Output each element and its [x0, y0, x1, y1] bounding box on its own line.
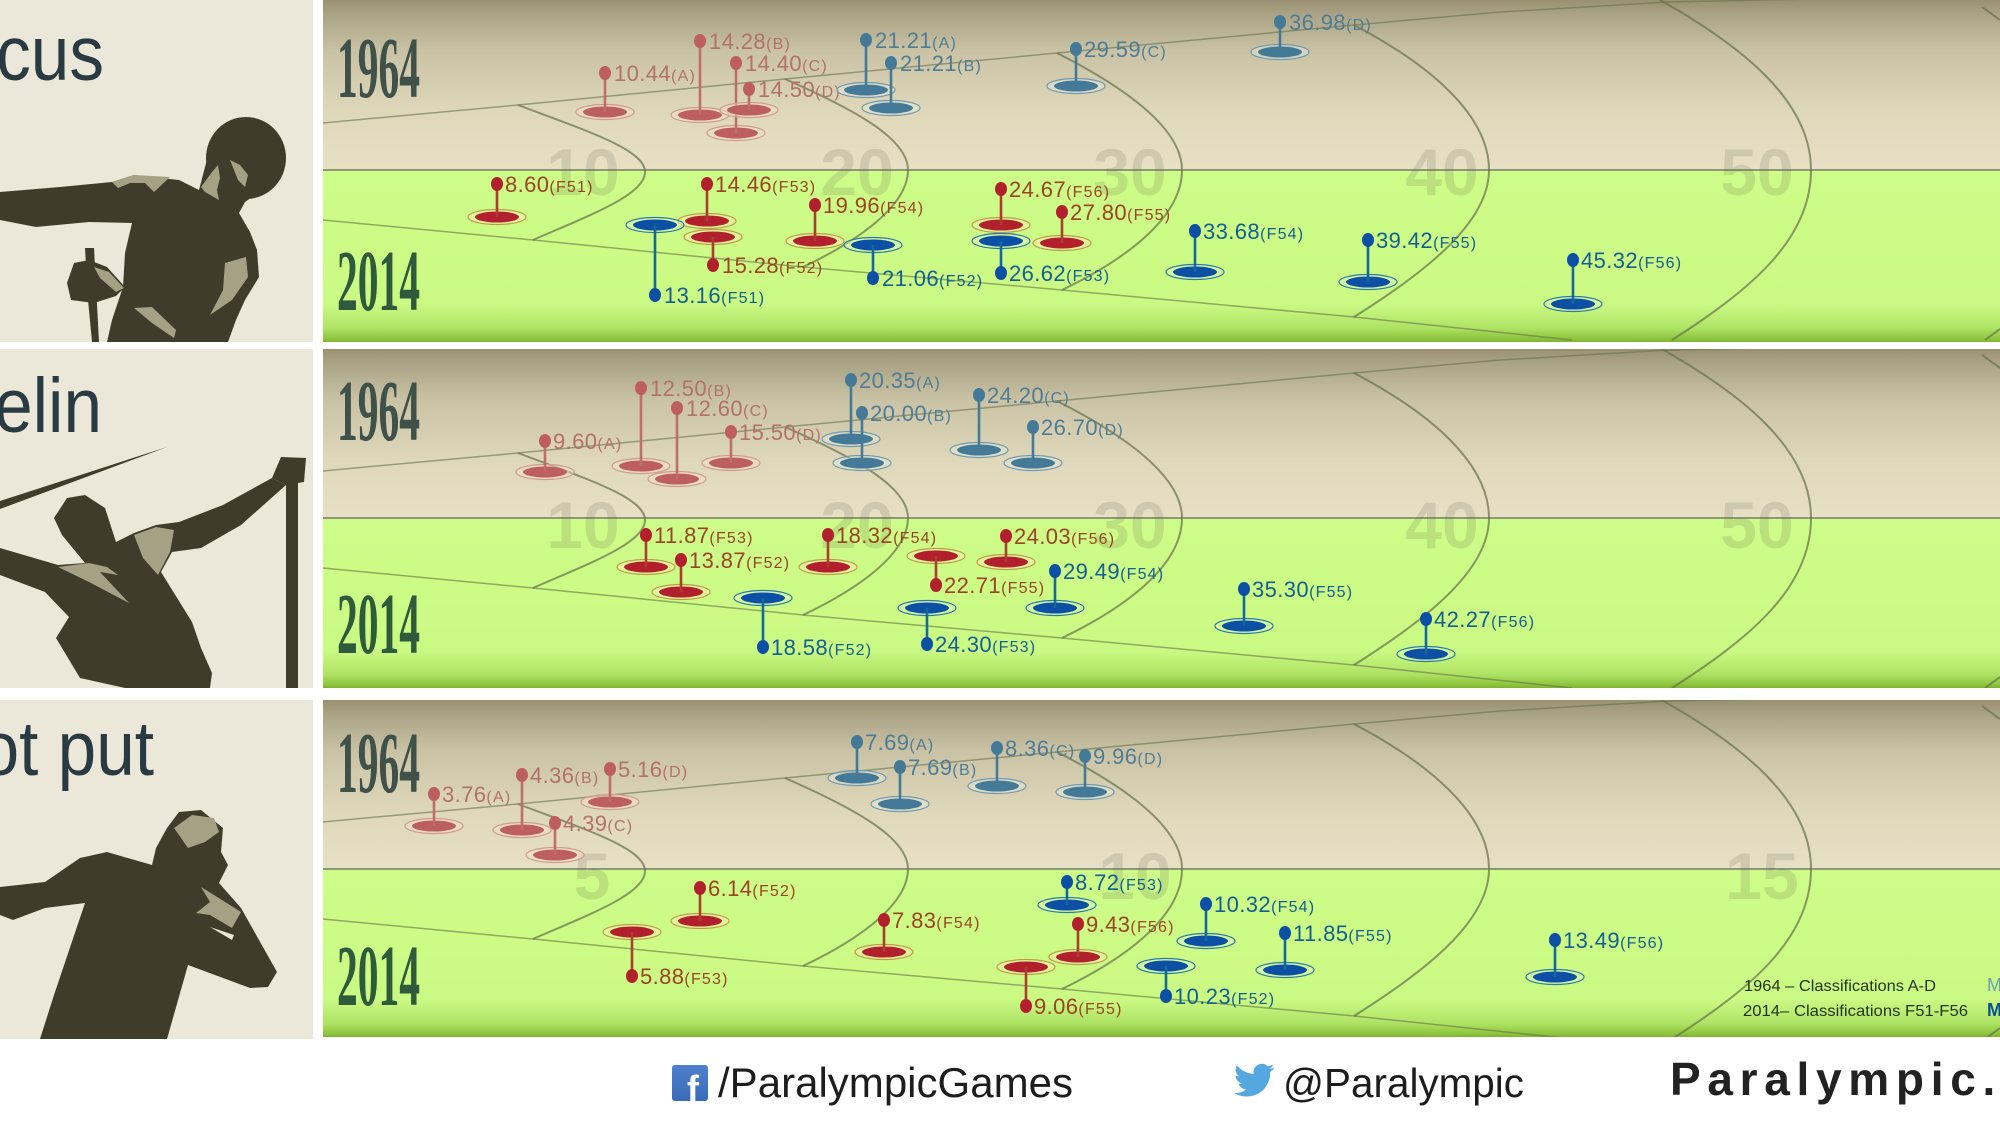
chart: javelin distances: 2014 — [337, 575, 420, 672]
pin 9.06 F55: 9.06(F55) — [1034, 994, 1123, 1019]
chart: shot put distances — [323, 694, 2000, 1039]
pin 5.88 F53: 5.88(F53) — [640, 964, 729, 989]
silhouette: shot putter — [0, 810, 277, 1039]
pin 14.46 F53: 14.46(F53) — [715, 172, 816, 197]
pin 11.87 F53 — [617, 523, 754, 574]
pin 18.58 F52: 18.58(F52) — [771, 635, 872, 660]
pin 13.16 F51 — [626, 218, 765, 308]
pin 5.88 F53 — [603, 924, 729, 989]
pin 24.30 F53 — [898, 600, 1036, 657]
pin 3.76 A: 3.76(A) — [442, 782, 511, 807]
pin 24.03 F56 — [977, 524, 1115, 570]
pin 9.43 F56 — [1049, 912, 1175, 964]
chart: discus distances: 1964 — [337, 19, 420, 116]
legend: 2014– Classifications F51-F56 — [1743, 1003, 1968, 1020]
pin 42.27 F56: 42.27(F56) — [1434, 607, 1535, 632]
pin 12.50 B — [612, 376, 732, 474]
pin 4.39 C: 4.39(C) — [563, 811, 633, 836]
pin 11.85 F55 — [1256, 921, 1393, 978]
pin 26.70 D: 26.70(D) — [1041, 415, 1124, 440]
pin 29.59 C: 29.59(C) — [1084, 37, 1167, 62]
pin 18.32 F54 — [799, 523, 937, 574]
pin 14.40 C — [707, 51, 828, 140]
distance scale: 40 — [1405, 488, 1479, 562]
chart: shot put distances: 2014 — [337, 927, 420, 1024]
pin 15.50 D — [702, 420, 822, 470]
chart: discus distances — [323, 0, 2000, 342]
pin 12.50 B: 12.50(B) — [650, 376, 732, 401]
silhouette: javelin thrower — [0, 447, 306, 688]
pin 21.21 B — [862, 51, 982, 116]
pin 8.60 F51 — [468, 172, 594, 224]
pin 8.36 C: 8.36(C) — [1005, 736, 1075, 761]
pin 6.14 F52 — [671, 876, 797, 928]
pin 7.83 F54 — [855, 908, 981, 960]
legend: 1964 – Classifications A-D — [1744, 978, 1936, 995]
pin 8.72 F53 — [1038, 870, 1164, 912]
pin 3.76 A — [405, 782, 511, 834]
pin 42.27 F56 — [1397, 607, 1535, 662]
pin 19.96 F54: 19.96(F54) — [823, 193, 924, 218]
pin 21.21 A: 21.21(A) — [875, 28, 957, 53]
pin 19.96 F54 — [786, 193, 924, 248]
pin 36.98 D — [1251, 10, 1372, 60]
pin 24.03 F56: 24.03(F56) — [1014, 524, 1115, 549]
pin 13.16 F51: 13.16(F51) — [664, 283, 765, 308]
pin 39.42 F55: 39.42(F55) — [1376, 228, 1477, 253]
pin 14.28 B: 14.28(B) — [709, 29, 791, 54]
pin 21.06 F52 — [844, 238, 983, 291]
pin 7.69 A — [828, 730, 934, 786]
pin 9.96 D — [1056, 744, 1163, 800]
pin 27.80 F55: 27.80(F55) — [1070, 200, 1171, 225]
pin 39.42 F55 — [1339, 228, 1477, 290]
distance scale: 10 — [546, 488, 620, 562]
pin 29.49 F54: 29.49(F54) — [1063, 559, 1164, 584]
pin 35.30 F55 — [1215, 577, 1353, 634]
pin 14.46 F53 — [678, 172, 816, 228]
distance scale — [546, 488, 1794, 562]
distance scale: 40 — [1405, 135, 1479, 209]
track sector lines and distance arcs — [323, 694, 2000, 1039]
pin 9.43 F56: 9.43(F56) — [1086, 912, 1175, 937]
pin 24.67 F56: 24.67(F56) — [1009, 177, 1110, 202]
pin 21.21 A — [837, 28, 957, 98]
pin 9.06 F55 — [997, 960, 1123, 1019]
pin 29.59 C — [1047, 37, 1167, 94]
legend — [1743, 975, 2000, 1020]
pin 12.60 C: 12.60(C) — [686, 396, 769, 421]
pin 10.32 F54: 10.32(F54) — [1214, 892, 1315, 917]
pin 15.50 D: 15.50(D) — [739, 420, 822, 445]
pin 10.32 F54 — [1177, 892, 1315, 948]
track sector lines and distance arcs — [323, 343, 2000, 688]
pin 15.28 F52 — [684, 230, 823, 278]
distance scale: 50 — [1720, 488, 1794, 562]
track sector lines and distance arcs — [323, 0, 2000, 340]
pin 45.32 F56 — [1544, 248, 1682, 312]
pin 7.69 A: 7.69(A) — [865, 730, 934, 755]
panel: shot put — [0, 694, 2000, 1039]
pin 11.87 F53: 11.87(F53) — [654, 523, 754, 548]
pin 7.69 B: 7.69(B) — [908, 755, 977, 780]
distance scale: 5 — [574, 839, 610, 913]
pin 10.44 A: 10.44(A) — [614, 61, 696, 86]
chart: javelin distances: 1964 — [337, 362, 420, 459]
facebook handle: /ParalympicGames — [718, 1059, 1073, 1106]
pin 27.80 F55 — [1033, 200, 1171, 250]
pin 22.71 F55 — [907, 548, 1045, 598]
distance scale — [546, 135, 1794, 209]
pin 10.44 A — [576, 61, 696, 120]
twitter handle: @Paralympic — [1283, 1060, 1524, 1106]
silhouette: discus thrower — [0, 117, 286, 342]
pin 24.20 C — [950, 383, 1070, 458]
panel: javelin — [0, 343, 2000, 688]
pin 14.28 B — [671, 29, 791, 122]
pin 15.28 F52: 15.28(F52) — [722, 253, 823, 278]
distance scale: 20 — [820, 135, 894, 209]
pin 26.70 D — [1004, 415, 1124, 470]
pin 24.67 F56 — [972, 177, 1110, 232]
pin 24.30 F53: 24.30(F53) — [935, 632, 1036, 657]
pin 4.39 C — [526, 811, 633, 862]
footer — [672, 1053, 2000, 1109]
athlete card: javelin — [0, 349, 313, 688]
pin 33.68 F54: 33.68(F54) — [1203, 219, 1304, 244]
pin 20.35 A: 20.35(A) — [859, 368, 941, 393]
pin 33.68 F54 — [1166, 219, 1304, 280]
distance scale: 50 — [1720, 135, 1794, 209]
pin 10.23 F52 — [1137, 958, 1275, 1009]
pin 9.60 A: 9.60(A) — [553, 429, 622, 454]
pin 10.23 F52: 10.23(F52) — [1174, 984, 1275, 1009]
pin 18.58 F52 — [734, 590, 872, 660]
pin 13.49 F56 — [1526, 928, 1664, 984]
pin 20.00 B: 20.00(B) — [870, 401, 952, 426]
distance scale: 10 — [546, 135, 620, 209]
distance scale: 10 — [1098, 839, 1172, 913]
distance scale: 30 — [1093, 488, 1167, 562]
pin 20.35 A — [822, 368, 941, 446]
pin 21.21 B: 21.21(B) — [900, 51, 982, 76]
pin 26.62 F53: 26.62(F53) — [1009, 261, 1110, 286]
chart: shot put distances: 1964 — [337, 714, 420, 811]
distance scale: 15 — [1725, 839, 1799, 913]
pin 4.36 B — [493, 763, 599, 838]
pin 13.87 F52 — [652, 548, 790, 600]
pin 18.32 F54: 18.32(F54) — [836, 523, 937, 548]
pin 24.20 C: 24.20(C) — [987, 383, 1070, 408]
pin 22.71 F55: 22.71(F55) — [944, 573, 1045, 598]
athlete card: discus — [0, 0, 313, 342]
pin 6.14 F52: 6.14(F52) — [708, 876, 797, 901]
pin 13.87 F52: 13.87(F52) — [689, 548, 790, 573]
pin 8.36 C — [968, 736, 1075, 794]
pin 36.98 D: 36.98(D) — [1289, 10, 1372, 35]
icon: facebook: f — [687, 1068, 700, 1109]
pin 7.69 B — [871, 755, 977, 812]
pin 4.36 B: 4.36(B) — [530, 763, 599, 788]
pin 8.60 F51: 8.60(F51) — [505, 172, 594, 197]
pin 14.50 D — [720, 77, 841, 118]
pin 13.49 F56: 13.49(F56) — [1563, 928, 1664, 953]
chart: discus distances: 2014 — [337, 232, 420, 329]
chart: javelin distances — [323, 343, 2000, 688]
pin 21.06 F52: 21.06(F52) — [882, 266, 983, 291]
distance scale — [574, 839, 1799, 913]
pin 14.50 D: 14.50(D) — [758, 77, 841, 102]
pin 20.00 B — [833, 401, 952, 470]
pin 11.85 F55: 11.85(F55) — [1293, 921, 1393, 946]
pin 9.96 D: 9.96(D) — [1093, 744, 1163, 769]
pin 14.40 C: 14.40(C) — [745, 51, 828, 76]
pin 45.32 F56: 45.32(F56) — [1581, 248, 1682, 273]
icon: twitter bird — [1234, 1064, 1274, 1097]
athlete card: shot put — [0, 700, 313, 1039]
pin 5.16 D: 5.16(D) — [618, 757, 688, 782]
distance scale: 30 — [1093, 135, 1167, 209]
pin 26.62 F53 — [972, 234, 1110, 286]
pin 29.49 F54 — [1026, 559, 1164, 616]
pin 12.60 C — [648, 396, 769, 486]
pin 9.60 A — [516, 429, 622, 480]
pin 7.83 F54: 7.83(F54) — [892, 908, 981, 933]
pin 8.72 F53: 8.72(F53) — [1075, 870, 1164, 895]
panel: discus — [0, 0, 2000, 342]
pin 35.30 F55: 35.30(F55) — [1252, 577, 1353, 602]
distance scale: 20 — [820, 488, 894, 562]
pin 5.16 D — [581, 757, 688, 810]
icon: facebook — [672, 1065, 708, 1109]
